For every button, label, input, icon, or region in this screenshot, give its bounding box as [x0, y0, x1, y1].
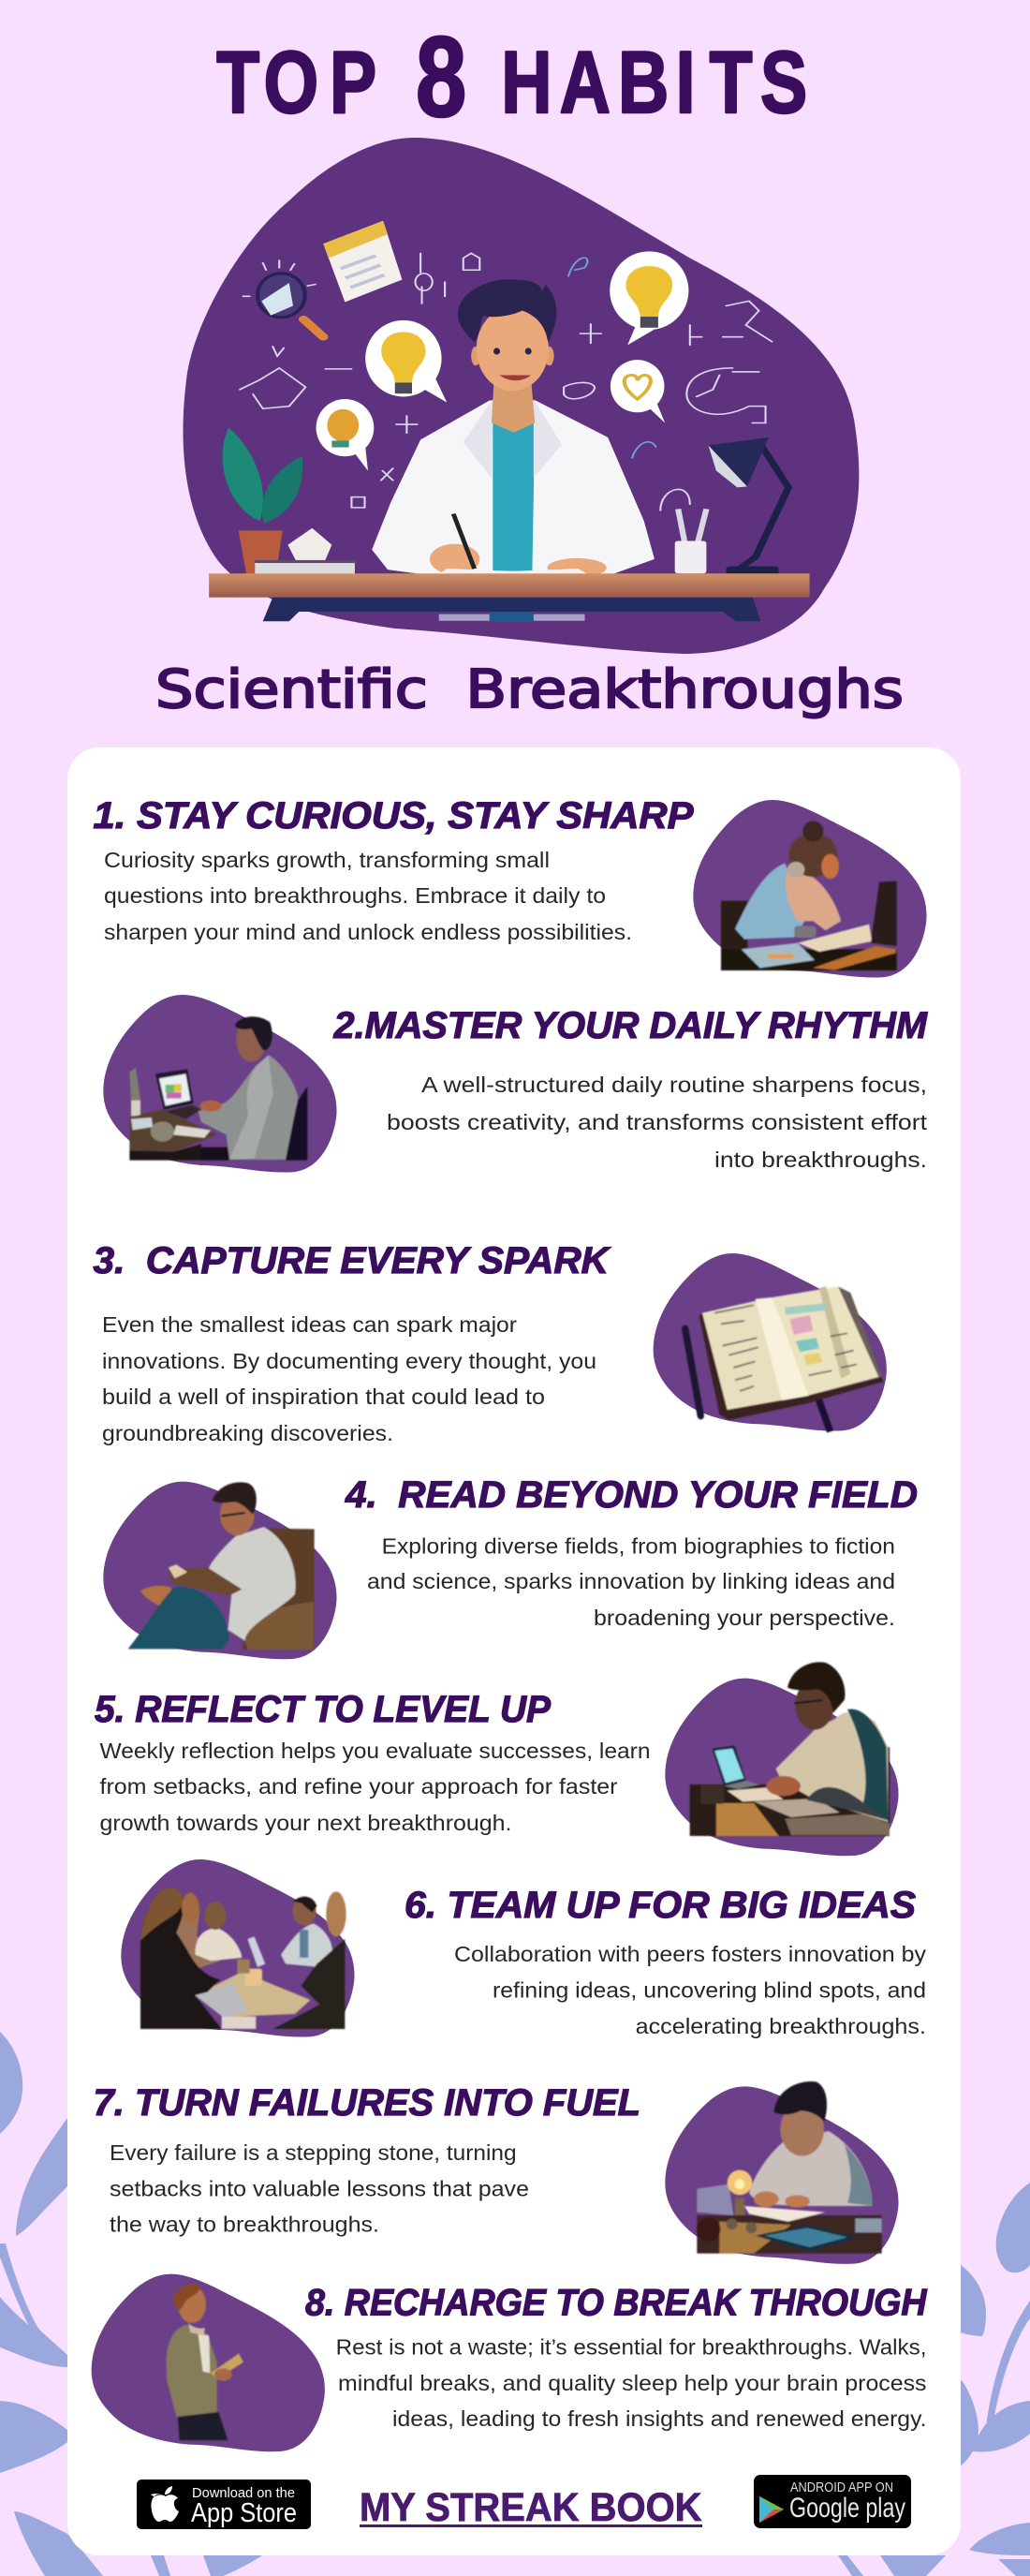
icon: head bubble — [316, 399, 374, 471]
habit 4 body — [367, 1534, 895, 1630]
icon: light bulb bubble right — [610, 251, 688, 345]
icon: apple logo — [151, 2486, 179, 2522]
content card — [67, 748, 961, 2555]
habit 5 body — [99, 1739, 650, 1835]
habit 1 body: Curiosity sparks growth, transforming small — [104, 848, 550, 872]
title: HABITS — [501, 34, 807, 132]
habit 7 — [94, 2081, 899, 2264]
habit 1 heading: 1. STAY CURIOUS, STAY SHARP — [94, 795, 694, 836]
neck — [492, 378, 535, 433]
habit 1 — [94, 795, 927, 978]
doodles — [240, 253, 772, 511]
habit 2 body — [387, 1073, 928, 1172]
habit 6 body — [454, 1942, 927, 2038]
habit 3 body: innovations. By documenting every thought, you — [102, 1349, 596, 1373]
title: TOP — [216, 34, 417, 132]
lab coat — [372, 401, 655, 576]
habit 6 heading: 6. TEAM UP FOR BIG IDEAS — [405, 1885, 916, 1926]
habit 3 photo: open notebook and pen — [654, 1253, 887, 1431]
coat lapels — [464, 399, 562, 478]
icon: light bulb bubble left — [365, 320, 447, 403]
icon: crumpled paper — [287, 528, 331, 560]
habit 6 body: refining ideas, uncovering blind spots, and — [493, 1978, 926, 2003]
footer: app store badge — [137, 2480, 311, 2529]
habit 8 — [92, 2274, 928, 2451]
icon: calendar — [323, 221, 402, 302]
habit 2 body: boosts creativity, and transforms consistent effort — [387, 1110, 928, 1134]
footer: google play badge — [754, 2475, 911, 2528]
hair — [458, 279, 556, 342]
habit 5 body: growth towards your next breakthrough. — [99, 1811, 511, 1835]
habit 7 body: the way to breakthroughs. — [110, 2213, 379, 2237]
habit 5 photo: man writing beside laptop — [665, 1662, 899, 1856]
habit 3 body: Even the smallest ideas can spark major — [102, 1312, 517, 1337]
habit 6 body: accelerating breakthroughs. — [636, 2014, 926, 2038]
icon: pen cup — [675, 509, 706, 573]
habit 5 heading: 5. REFLECT TO LEVEL UP — [95, 1689, 551, 1730]
open book — [429, 569, 599, 581]
scientist figure — [372, 279, 655, 582]
habit 3 heading: 3. CAPTURE EVERY SPARK — [94, 1240, 611, 1281]
habit 2 heading: 2.MASTER YOUR DAILY RHYTHM — [333, 1005, 929, 1046]
habit 7 photo: young scientist with glowing bulb — [665, 2081, 899, 2264]
habit 4 — [103, 1474, 918, 1659]
title: 8 — [416, 14, 520, 141]
habit 7 body: setbacks into valuable lessons that pave — [110, 2176, 529, 2200]
habit 4 body: Exploring diverse fields, from biographies to fiction — [382, 1534, 895, 1559]
habit 2 body: A well-structured daily routine sharpens focus, — [421, 1073, 927, 1097]
icon: desk lamp — [708, 437, 788, 575]
icon: heart bubble — [611, 360, 665, 423]
habit 5 — [95, 1662, 899, 1856]
habit 2 — [103, 995, 929, 1173]
ears — [471, 347, 554, 365]
face — [477, 307, 549, 391]
habit 4 body: and science, sparks innovation by linking ideas and — [367, 1569, 895, 1593]
habit 6 photo: team meeting around table — [121, 1859, 355, 2037]
habit 2 body: into breakthroughs. — [714, 1147, 927, 1172]
habit 8 body: ideas, leading to fresh insights and renewed energy. — [392, 2406, 927, 2431]
habit 3 — [94, 1240, 887, 1445]
habit 3 body: groundbreaking discoveries. — [102, 1421, 393, 1445]
habit 6 body: Collaboration with peers fosters innovation by — [454, 1942, 927, 1966]
footer: brand link: MY STREAK BOOK — [360, 2485, 702, 2530]
hands — [430, 544, 607, 577]
habit 6 — [121, 1859, 927, 2038]
habit 8 photo: man walking with a book — [92, 2274, 325, 2451]
footer: app store badge: App Store — [191, 2498, 297, 2528]
habit 3 body: build a well of inspiration that could lead to — [102, 1384, 545, 1409]
habit 8 body — [336, 2335, 927, 2431]
decorative leaves: right side — [838, 2183, 1030, 2576]
habit 7 body: Every failure is a stepping stone, turning — [110, 2140, 517, 2165]
icon: books — [255, 560, 358, 575]
habit 8 body: Rest is not a waste; it’s essential for breakthroughs. Walks, — [336, 2335, 927, 2360]
footer: app store badge: Download on the — [192, 2485, 295, 2501]
icon: plant — [223, 428, 302, 574]
habit 3 body — [102, 1312, 596, 1445]
habit 8 body: mindful breaks, and quality sleep help your brain process — [338, 2371, 927, 2395]
habit 7 body — [110, 2140, 529, 2237]
icon: play triangle — [759, 2496, 784, 2523]
habit 4 photo: man reading in armchair — [103, 1482, 337, 1659]
habit 5 body: from setbacks, and refine your approach for faster — [99, 1774, 618, 1799]
habit 1 photo: woman writing at desk — [693, 800, 927, 978]
decorative leaves: left side — [0, 2032, 262, 2576]
subtitle: Scientific Breakthroughs — [155, 659, 904, 720]
habit 1 body — [104, 848, 632, 944]
pen — [453, 513, 475, 569]
habit 1 body: sharpen your mind and unlock endless possibilities. — [104, 920, 632, 944]
habit 1 body: questions into breakthroughs. Embrace it daily to — [104, 883, 606, 908]
icon: magnifier — [258, 274, 323, 337]
hero purple blob — [184, 138, 859, 654]
habit 4 heading: 4. READ BEYOND YOUR FIELD — [345, 1474, 918, 1516]
habit 7 heading: 7. TURN FAILURES INTO FUEL — [94, 2082, 640, 2124]
eyes and smile — [493, 348, 532, 355]
habit 4 body: broadening your perspective. — [594, 1606, 895, 1630]
hero illustration — [184, 138, 859, 654]
footer: google play badge: ANDROID APP ON — [790, 2480, 893, 2495]
habit 8 heading: 8. RECHARGE TO BREAK THROUGH — [305, 2282, 928, 2323]
teal shirt — [493, 421, 535, 571]
desk — [209, 573, 810, 621]
footer: google play badge: Google play — [789, 2493, 905, 2524]
habit 2 photo: man at laptop — [103, 995, 337, 1173]
habit 5 body: Weekly reflection helps you evaluate successes, learn — [99, 1739, 650, 1763]
